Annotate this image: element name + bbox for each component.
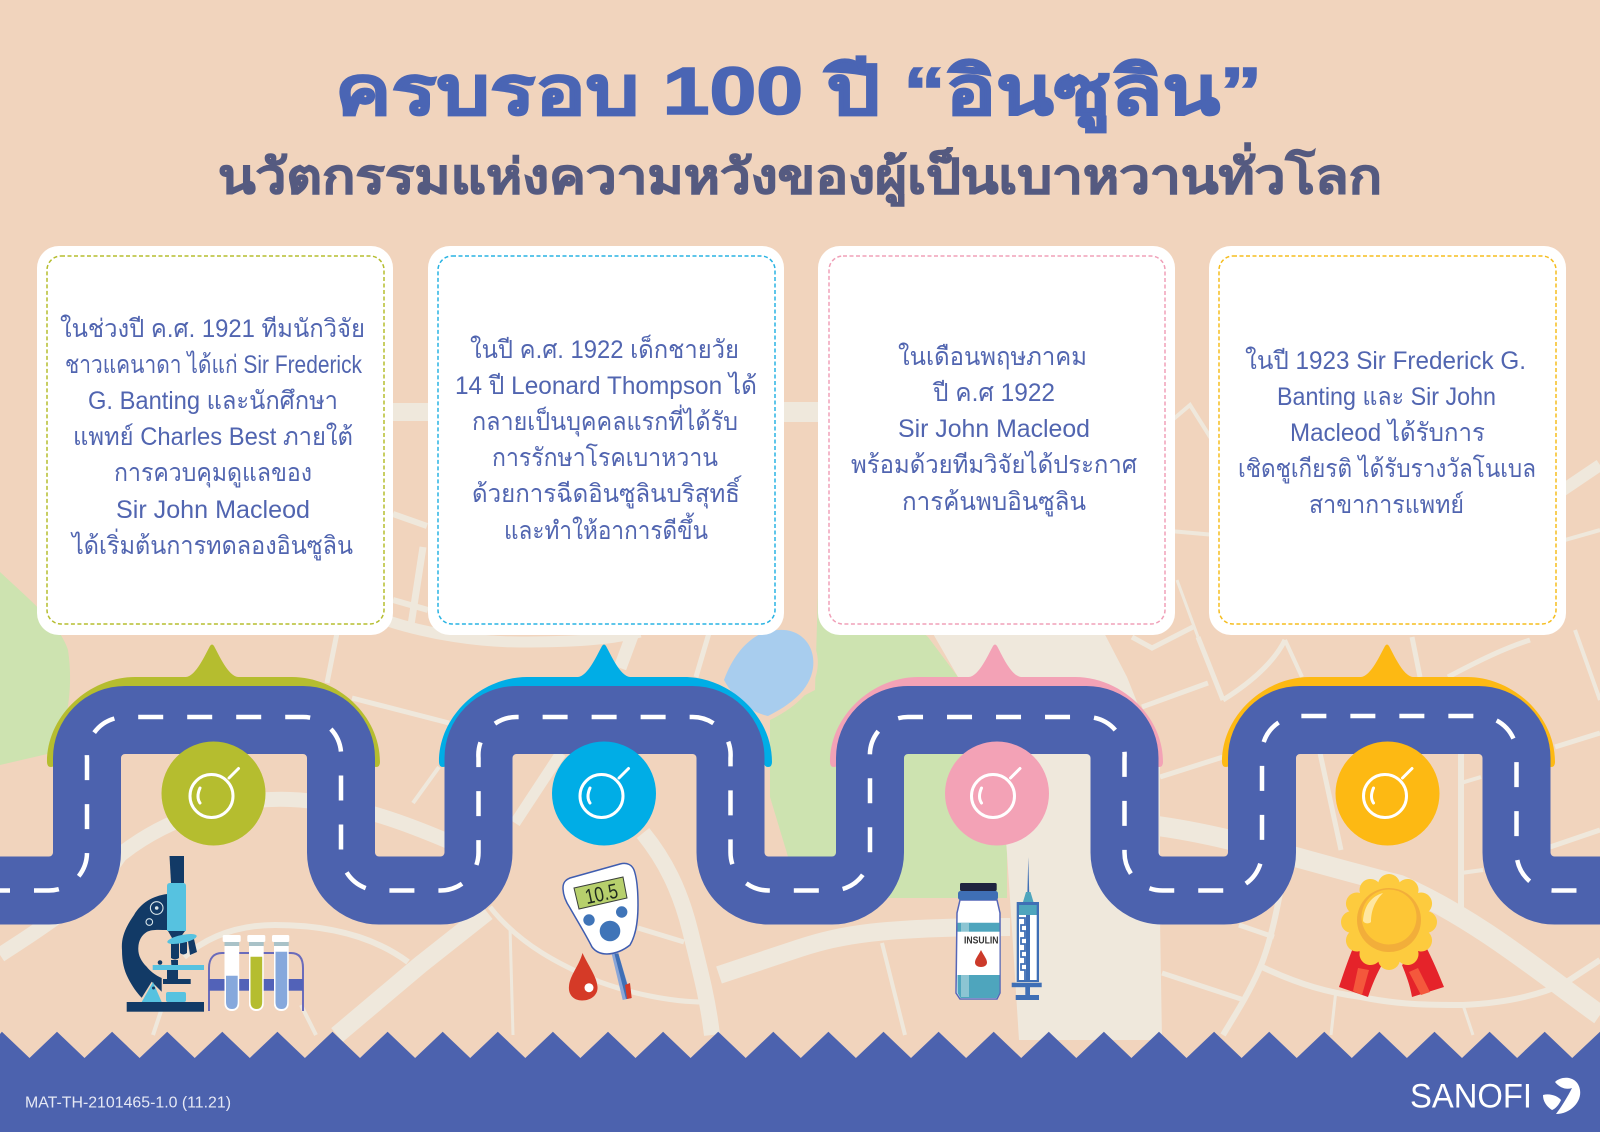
document code: MAT-TH-2101465-1.0 (11.21) (25, 1094, 231, 1112)
icon: magnifier yellow (1336, 742, 1440, 846)
icon: syringe (1012, 857, 1042, 1000)
icon: magnifier pink (945, 742, 1049, 846)
pointer band: olive (47, 644, 380, 767)
map background (0, 405, 1600, 1040)
icon: insulin vial: INSULIN (964, 935, 998, 946)
panel: 1921 research: G. Banting และนักศึกษา (88, 387, 338, 415)
footer band (0, 1032, 1600, 1132)
panel: 1921 research: แพทย์ Charles Best ภายใต้ (73, 422, 353, 451)
panel: 1922 first patient: 14 ปี Leonard Thompson ได้ (455, 371, 757, 400)
panel: 1923 Nobel prize: ในปี 1923 Sir Frederick G. (1245, 346, 1526, 375)
title: ครบรอบ 100 ปี “อินซูลิน” (335, 54, 1262, 133)
winding road (0, 716, 1600, 890)
panel: 1921 research: Sir John Macleod (116, 496, 310, 524)
icon: medal (1339, 874, 1444, 997)
panel: 1922 discovery announcement: Sir John Macleod (898, 415, 1090, 443)
panel: 1923 Nobel prize: Macleod ได้รับการ (1290, 418, 1485, 447)
icon: glucose meter (563, 863, 638, 1000)
icon: insulin vial (956, 883, 1000, 999)
icon: microscope (122, 856, 204, 1012)
panel: 1921 research: ชาวแคนาดา ได้แก่ Sir Frederick (65, 350, 362, 379)
sanofi logo: SANOFI (1410, 1078, 1532, 1116)
pointer band: pink (830, 644, 1163, 767)
panel: 1922 discovery announcement: ในเดือนพฤษภาคม (898, 342, 1087, 371)
panel: 1923 Nobel prize (1209, 246, 1566, 635)
panel: 1922 first patient: ในปี ค.ศ. 1922 เด็กชายวัย (470, 334, 739, 364)
panel: 1923 Nobel prize: เชิดชูเกียรติ ได้รับรางวัลโนเบล (1238, 454, 1536, 484)
panel: 1923 Nobel prize: Banting และ Sir John (1277, 383, 1496, 411)
panel: 1921 research: ในช่วงปี ค.ศ. 1921 ทีมนักวิจัย (60, 314, 365, 343)
pointer band: blue (439, 644, 772, 767)
icon: glucose meter: 10.5 (583, 880, 620, 909)
panel: 1922 first patient: ด้วยการฉีดอินซูลินบริสุทธิ์ (472, 475, 742, 509)
panel: 1923 Nobel prize: สาขาการแพทย์ (1309, 491, 1464, 519)
panel: 1922 discovery announcement: พร้อมด้วยทีมวิจัยได้ประกาศ (851, 450, 1137, 479)
icon: magnifier olive (162, 742, 266, 846)
panel: 1921 research: การควบคุมดูแลของ (114, 459, 312, 488)
icon: test tubes in rack (209, 935, 303, 1011)
panel: 1922 first patient: และทำให้อาการดีขึ้น (504, 512, 708, 545)
panel: 1922 discovery announcement: การค้นพบอินซูลิน (902, 488, 1086, 517)
icon: blood drop (569, 953, 598, 1000)
icon: magnifier blue (552, 742, 656, 846)
panel: 1922 first patient: การรักษาโรคเบาหวาน (492, 443, 718, 472)
panel: 1922 discovery announcement: ปี ค.ศ 1922 (932, 379, 1055, 407)
panel: 1922 first patient: กลายเป็นบุคคลแรกที่ได้รับ (472, 404, 738, 437)
panel: 1922 discovery announcement (818, 246, 1175, 635)
panel: 1921 research: ได้เริ่มต้นการทดลองอินซูลิน (70, 528, 353, 561)
panel: 1921 research (37, 246, 393, 635)
pointer band: yellow (1222, 644, 1555, 767)
panel: 1922 first patient (428, 246, 784, 635)
subtitle: นวัตกรรมแห่งความหวังของผู้เป็นเบาหวานทั่วโลก (218, 142, 1382, 207)
